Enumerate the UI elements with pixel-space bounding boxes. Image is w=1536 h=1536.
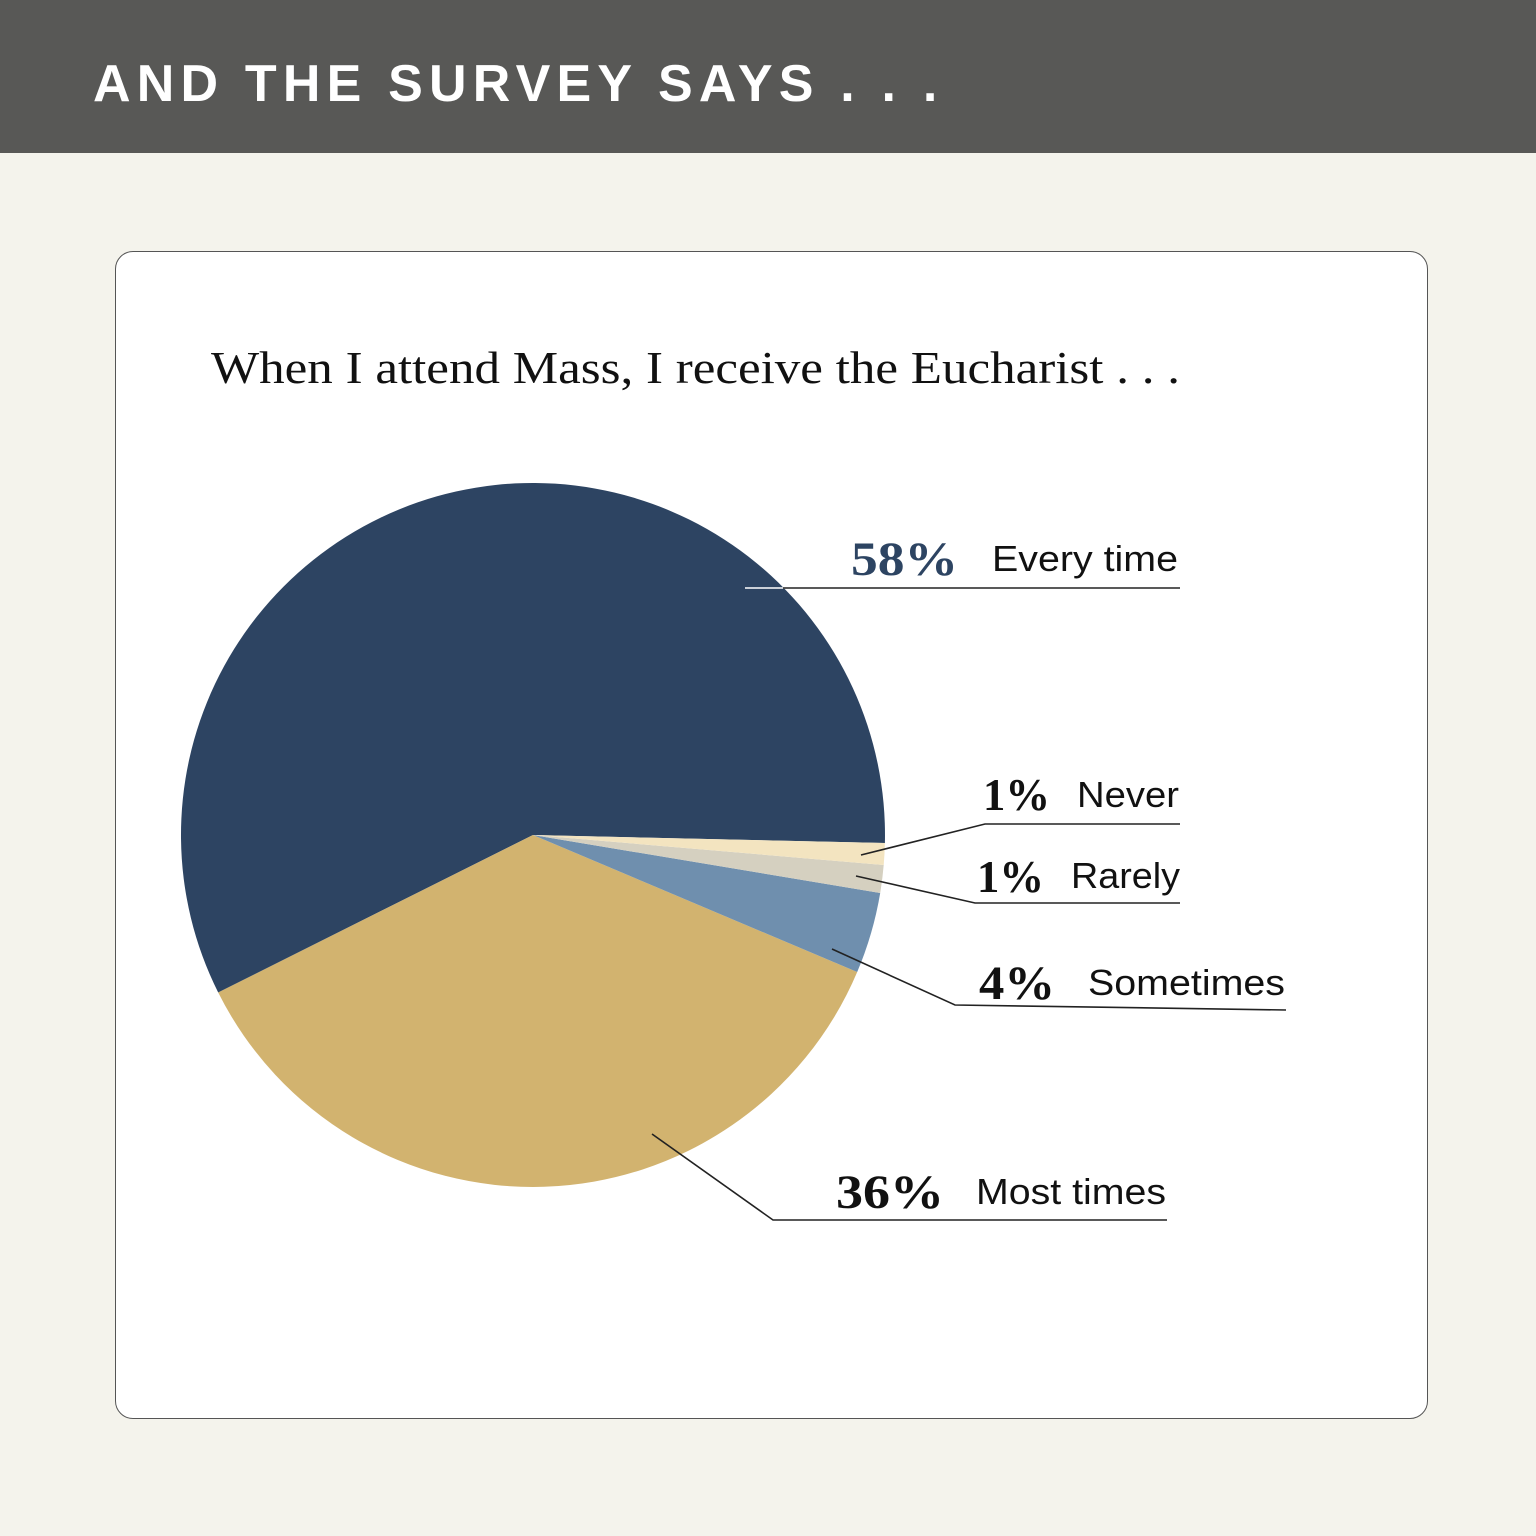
label: rarely (977, 851, 1180, 902)
label: most times: 36% (836, 1166, 944, 1219)
chart title: When I attend Mass, I receive the Eucharist . . . (211, 342, 1180, 393)
header bar: AND THE SURVEY SAYS . . . (93, 55, 943, 113)
label: rarely: Rarely (1071, 855, 1180, 896)
label: never: Never (1077, 774, 1179, 815)
label: most times: Most times (976, 1171, 1166, 1212)
label: sometimes (979, 957, 1285, 1010)
label: sometimes: Sometimes (1088, 962, 1285, 1003)
label: every time (851, 533, 1178, 586)
label: never: 1% (983, 769, 1050, 820)
pie slices (181, 483, 885, 1187)
label: never (983, 769, 1179, 820)
label: rarely: 1% (977, 851, 1044, 902)
label: every time: Every time (992, 538, 1178, 579)
label: every time: 58% (851, 533, 958, 586)
leader lines (652, 588, 1286, 1220)
header bar (0, 0, 1536, 153)
label: sometimes: 4% (979, 957, 1055, 1010)
panel: chart card (115, 251, 1428, 1419)
label: most times (836, 1166, 1166, 1219)
